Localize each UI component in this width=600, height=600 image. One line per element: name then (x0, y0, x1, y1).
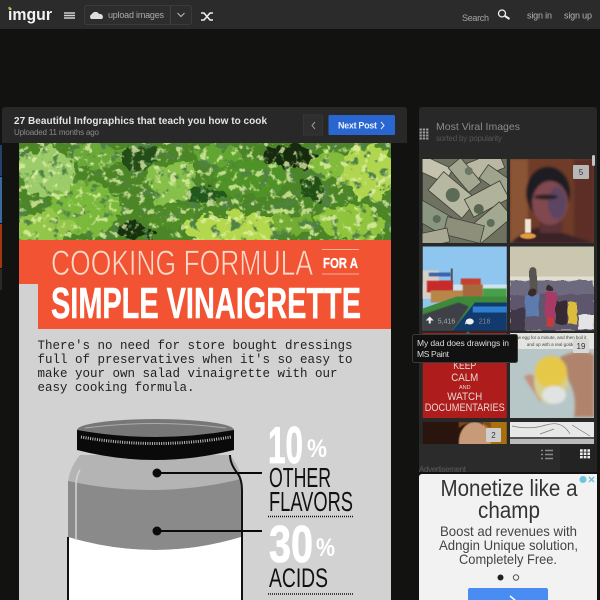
ad body text: Boost ad revenues with (440, 523, 577, 539)
icon: grid (420, 130, 428, 138)
heading: for a: FOR A (323, 255, 358, 272)
thumbnail: keep calm (422, 333, 507, 418)
thumbnail: keep calm: KEEP (453, 360, 476, 372)
panel: most viral images (412, 107, 597, 472)
label: 30% acids: 30 (269, 516, 313, 574)
label: 30% acids: % (316, 534, 335, 562)
panel subheading: sorted by popularity (436, 134, 502, 143)
intro text: There's no need for store bought dressings (38, 339, 352, 353)
badge: 5: 5 (579, 168, 584, 177)
badge: 2: 2 (491, 431, 496, 440)
thumbnail: keep calm: CALM (451, 372, 478, 384)
thumbnail: ms paint town: 5,416 (438, 318, 455, 326)
thumbnail: sketch (510, 422, 594, 444)
jar outline (68, 455, 242, 600)
advertisement label: Advertisement (419, 465, 467, 474)
icon: grid view (580, 450, 590, 457)
infographic (19, 143, 391, 600)
ad info icons (580, 476, 594, 483)
label: 10% other flavors (268, 417, 354, 517)
jar diagram (68, 419, 262, 600)
thumbnail: egg (510, 333, 594, 418)
thumbnail: egg: w egg for a minute, and then boil it (518, 335, 587, 340)
ad body text: Completely Free. (459, 551, 557, 567)
panel: advertisement (419, 474, 597, 600)
intro text: easy cooking formula. (38, 381, 194, 395)
upload button: upload images (108, 10, 164, 20)
post title bar (2, 107, 407, 143)
thumbnail: crowd (510, 246, 594, 330)
lettuce highlights (19, 143, 391, 240)
ad headline: Monetize like a (440, 475, 578, 501)
tooltip: MS Paint (417, 349, 450, 359)
badge: 5 (573, 165, 589, 179)
tooltip (412, 331, 518, 362)
badge: 19: 19 (577, 342, 586, 351)
thumbnail: portrait (510, 159, 594, 243)
thumbnail: keep calm: AND (459, 385, 471, 391)
lettuce photo (15, 143, 395, 243)
ad headline (440, 475, 578, 523)
sign in link: sign in (527, 10, 552, 20)
label: 10% other flavors: % (307, 435, 327, 463)
intro text: make your own salad vinaigrette with our (38, 367, 338, 381)
label: 30% acids: ACIDS (269, 563, 328, 593)
next post button (328, 115, 395, 135)
oil layer (68, 537, 241, 600)
jar highlight (76, 470, 80, 540)
logo: imgur (8, 5, 52, 24)
thumbnail: keep calm: WATCH (447, 391, 482, 403)
heading: for a (322, 250, 359, 274)
view toggle bar (419, 444, 597, 472)
badge: 2 (486, 428, 501, 442)
icon: shuffle (201, 13, 213, 20)
search (462, 10, 510, 23)
previous button (304, 115, 322, 135)
post title: 27 Beautiful Infographics that teach you how to cook (14, 116, 267, 127)
header bar (0, 0, 600, 29)
ad button (468, 588, 548, 600)
lettuce frills (19, 143, 391, 240)
upload button (84, 6, 192, 24)
carousel dots (498, 574, 519, 580)
thumbnail: money (422, 159, 507, 243)
intro text (38, 339, 352, 395)
callout line: acids (152, 526, 262, 536)
label: 10% other flavors: OTHER (269, 462, 331, 493)
sign up link: sign up (564, 10, 592, 20)
jar glass top (68, 455, 242, 540)
ad body text: Adngin Unique solution, (439, 537, 578, 553)
search: Search (462, 13, 489, 23)
jar lid (77, 419, 234, 460)
thumbnail: ms paint town (422, 246, 507, 330)
scrollbar (592, 155, 595, 166)
label: 10% other flavors: 10 (268, 417, 303, 475)
intro text: full of preservatives when it's so easy to (38, 353, 352, 367)
social share strip (0, 145, 2, 290)
thumbnail: egg: and up with a real golden (527, 342, 578, 347)
callout line: other flavors (152, 468, 262, 478)
ad headline: champ (478, 497, 540, 523)
tooltip: My dad does drawings in (417, 338, 509, 348)
label: 30% acids (268, 516, 354, 594)
icon: menu (64, 13, 75, 18)
panel heading: Most Viral Images (436, 121, 520, 133)
upload time: Uploaded 11 months ago (14, 128, 100, 137)
next post button: Next Post (338, 120, 377, 130)
badge: 19 (573, 339, 589, 353)
acid layer (68, 479, 241, 550)
label: 10% other flavors: FLAVORS (269, 486, 353, 517)
thumbnail: ms paint town: 218 (479, 318, 491, 326)
ad body text (439, 523, 578, 567)
icon: list view (541, 450, 553, 458)
title banner (19, 240, 391, 330)
heading: cooking formula: COOKING FORMULA (51, 244, 313, 283)
thumbnail: man (422, 422, 507, 444)
